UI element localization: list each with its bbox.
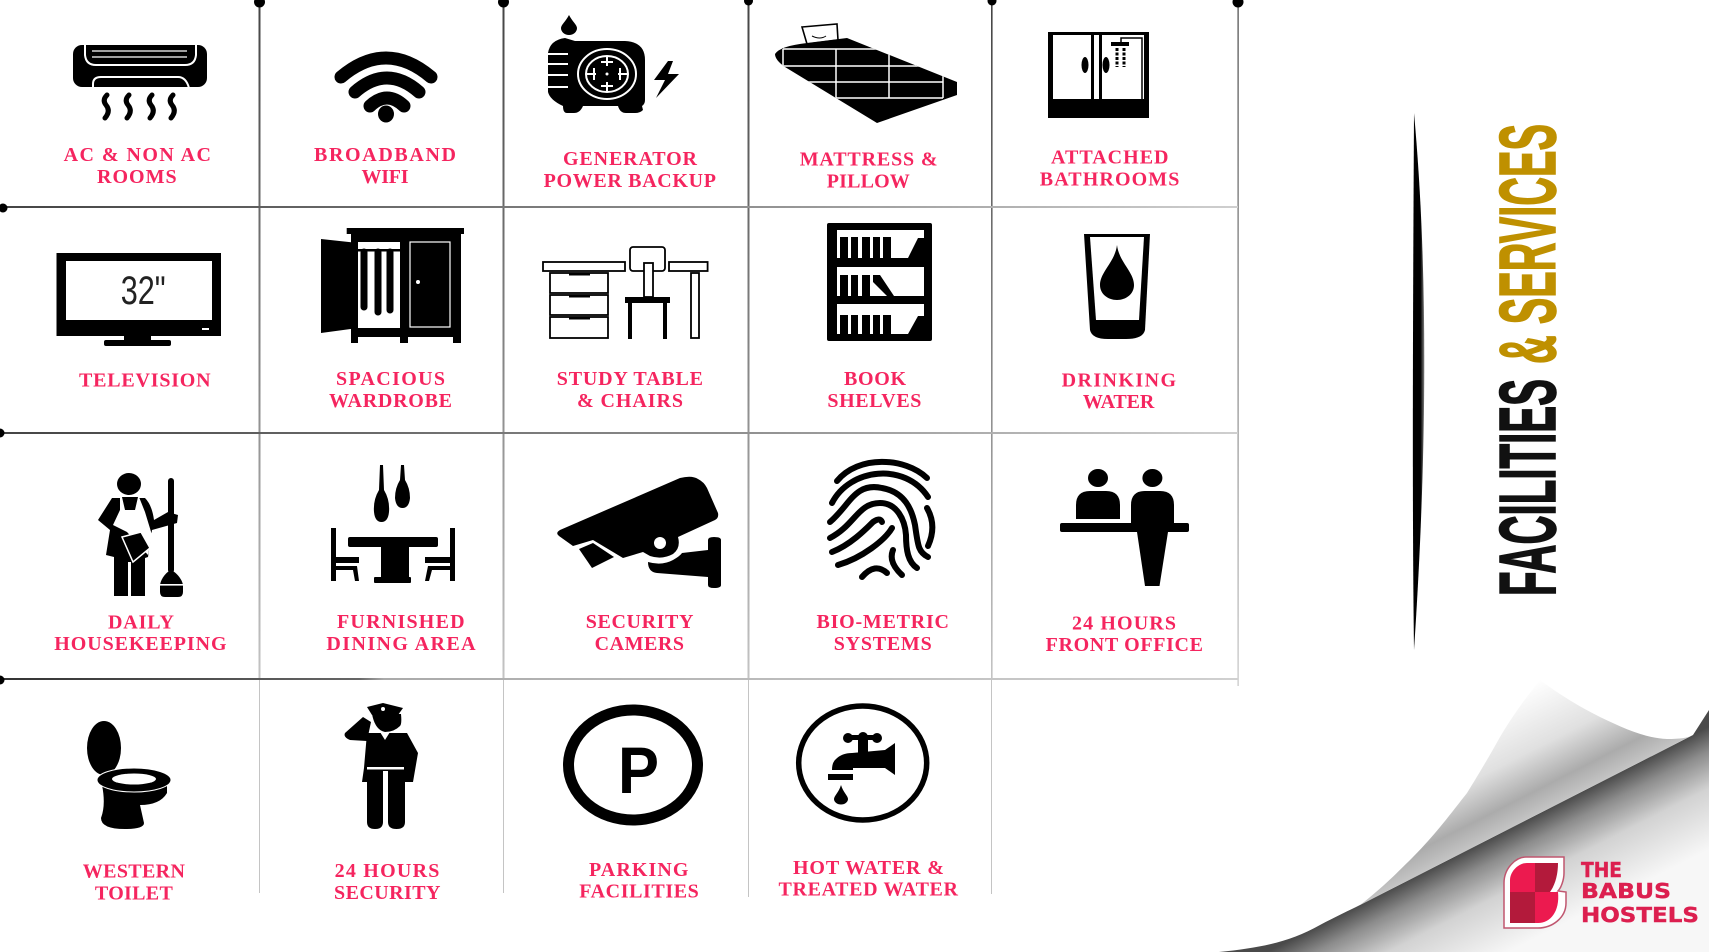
label: biometric: BIO-METRIC	[816, 611, 949, 633]
logo wordmark: THE	[1581, 858, 1622, 882]
label: television: TELEVISION	[79, 370, 211, 392]
label: wardrobe: WARDROBE	[329, 390, 452, 412]
label: western toilet	[83, 861, 185, 905]
cell: parking	[568, 710, 699, 903]
icon: parking sign: P	[618, 733, 659, 807]
label: drinking water	[1062, 370, 1176, 413]
label: hot water: HOT WATER &	[793, 857, 944, 879]
cell: broadband wifi	[314, 58, 456, 188]
cell: dining area	[326, 465, 476, 655]
label: study table	[557, 368, 703, 412]
label: dining area	[326, 611, 476, 655]
logo wordmark	[1581, 858, 1699, 927]
label: AC rooms	[64, 144, 211, 188]
label: housekeeping	[54, 611, 227, 655]
icon: mattress and pillow	[775, 24, 957, 123]
label: housekeeping: HOUSEKEEPING	[54, 633, 227, 655]
label: generator: POWER BACKUP	[544, 170, 716, 192]
logo wordmark: HOSTELS	[1581, 903, 1699, 927]
label: security cameras	[586, 611, 694, 655]
label: drinking water: WATER	[1083, 391, 1155, 413]
icon: fingerprint	[830, 462, 932, 577]
cell: biometric	[816, 462, 949, 655]
title: facilities and services: FACILITIES	[1483, 379, 1572, 596]
label: security cameras: SECURITY	[586, 611, 694, 633]
icon: security camera	[557, 477, 721, 588]
label: 24 hours security	[334, 860, 441, 904]
logo mark	[1504, 857, 1566, 928]
logo wordmark: BABUS	[1581, 879, 1671, 903]
label: bathrooms: BATHROOMS	[1040, 169, 1179, 191]
icon: water tap	[799, 706, 927, 820]
label: 24 hours security: SECURITY	[334, 882, 441, 904]
label: 24 hours security: 24 HOURS	[335, 860, 439, 882]
cell: generator	[544, 15, 716, 192]
label: wardrobe	[329, 368, 452, 412]
icon: front desk	[1060, 469, 1189, 586]
icon: bathroom	[1048, 32, 1149, 118]
label: wardrobe: SPACIOUS	[336, 368, 445, 390]
label: biometric	[816, 611, 949, 655]
icon: television: 32"	[121, 269, 166, 313]
label: front office	[1046, 612, 1203, 656]
cell: book shelves	[827, 223, 932, 412]
cell: 24 hours security	[334, 703, 441, 904]
icon: wardrobe	[321, 228, 464, 343]
icon: wifi	[341, 58, 431, 122]
label: generator: GENERATOR	[563, 148, 698, 170]
label: broadband: BROADBAND	[314, 144, 456, 166]
cell: western toilet	[83, 721, 185, 905]
icon: dining table	[331, 465, 455, 583]
label: parking	[579, 859, 699, 903]
label: dining area: DINING AREA	[326, 633, 476, 655]
icon: toilet	[87, 721, 171, 829]
cell: mattress	[775, 24, 957, 193]
label: dining area: FURNISHED	[337, 611, 465, 633]
label: parking: FACILITIES	[579, 881, 699, 903]
logo: the babus hostels	[1504, 857, 1699, 928]
icon: television	[56, 253, 221, 346]
label: broadband: WIFI	[362, 166, 409, 188]
label: biometric: SYSTEMS	[834, 633, 932, 655]
icon: air conditioner	[73, 44, 207, 118]
label: drinking water: DRINKING	[1062, 370, 1176, 392]
label: book shelves: SHELVES	[827, 390, 921, 412]
label: front office: FRONT OFFICE	[1046, 634, 1203, 656]
icon: study table and chair	[543, 247, 708, 339]
icon: housekeeper	[98, 473, 183, 597]
label: generator	[544, 148, 716, 192]
label: hot water: TREATED WATER	[778, 879, 959, 901]
label: book shelves: BOOK	[844, 368, 906, 390]
cell: television	[56, 253, 221, 392]
label: broadband	[314, 144, 456, 188]
icon: generator	[547, 15, 679, 113]
label: mattress: MATTRESS &	[800, 149, 938, 171]
label: bathrooms	[1040, 147, 1179, 191]
page curl	[1219, 680, 1709, 952]
cell: AC rooms	[64, 44, 211, 188]
label: bathrooms: ATTACHED	[1051, 147, 1168, 169]
icon: bookshelf	[827, 223, 932, 341]
cell: bathrooms	[1040, 32, 1179, 191]
label: western toilet: WESTERN	[83, 861, 185, 883]
label: security cameras: CAMERS	[595, 633, 684, 655]
label: study table: & CHAIRS	[577, 390, 683, 412]
label: mattress: PILLOW	[827, 171, 910, 193]
label: AC rooms: AC & NON AC	[64, 144, 211, 166]
cell: hot water	[778, 706, 959, 901]
label: western toilet: TOILET	[95, 883, 173, 905]
label: hot water	[778, 857, 959, 901]
label: front office: 24 HOURS	[1072, 612, 1176, 634]
cell: study table	[543, 247, 708, 412]
label: book shelves	[827, 368, 921, 412]
cell: housekeeping	[54, 473, 227, 655]
divider crescent shadow	[1413, 113, 1424, 650]
label: study table: STUDY TABLE	[557, 368, 703, 390]
label: housekeeping: DAILY	[108, 611, 175, 633]
cell: front office	[1046, 469, 1203, 656]
cell: security cameras	[557, 477, 721, 655]
label: mattress	[800, 149, 938, 193]
cell: drinking water	[1062, 234, 1176, 413]
icon: parking sign	[568, 710, 698, 820]
label: parking: PARKING	[589, 859, 689, 881]
icon: saluting guard	[345, 703, 418, 829]
grid lines	[0, 0, 1244, 897]
cell: wardrobe	[321, 228, 464, 412]
icon: water glass	[1084, 234, 1150, 339]
label: AC rooms: ROOMS	[97, 166, 177, 188]
